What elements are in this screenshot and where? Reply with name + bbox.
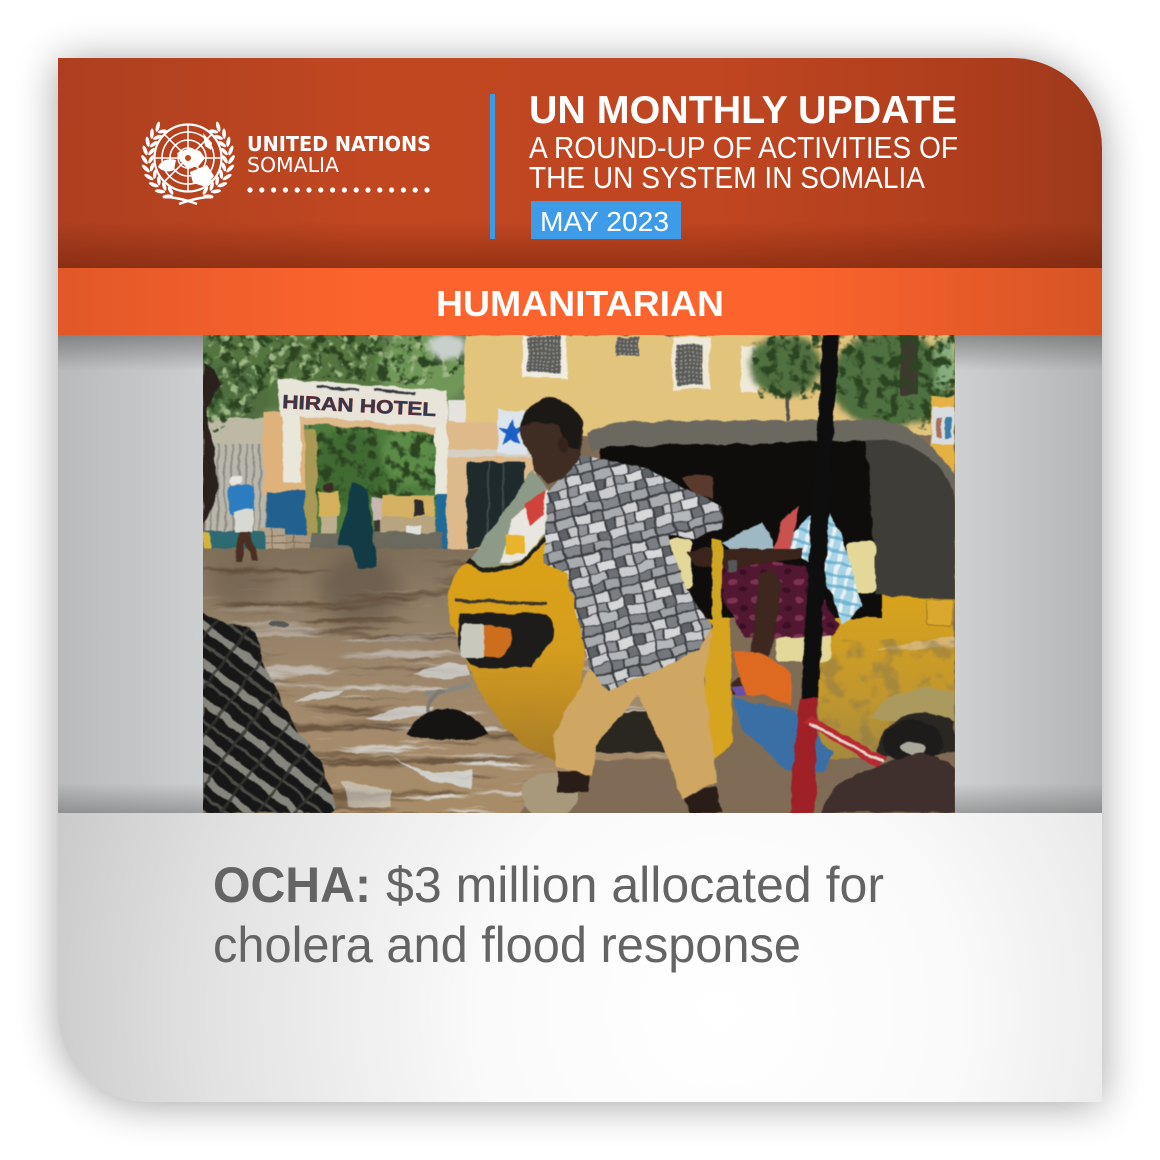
arch right pillar (432, 423, 450, 550)
orange section band (58, 268, 1102, 335)
passenger wrap (718, 562, 840, 638)
corrugated gate (205, 444, 267, 530)
lower caption background (58, 813, 1102, 1102)
man's lower legs (558, 772, 722, 813)
trees top left (203, 335, 466, 446)
barrels (204, 530, 266, 550)
foreground scarf (203, 612, 337, 813)
brick stack (258, 526, 312, 550)
passenger shirt (722, 505, 862, 625)
foreground face at left edge (203, 362, 220, 525)
mud splash (522, 773, 578, 817)
logo wordmark: SOMALIA (247, 153, 339, 177)
orange cargo (732, 650, 792, 708)
passenger arm and leg (688, 548, 802, 696)
shadow between legs (590, 712, 680, 752)
tree top right (748, 332, 955, 475)
man's trousers (553, 632, 717, 798)
title block: UN MONTHLY UPDATE (529, 89, 957, 132)
woman in dark hijab (337, 482, 377, 569)
right grey side panel (955, 335, 1102, 813)
rickshaw rear wheel (876, 714, 955, 764)
title block: A ROUND-UP OF ACTIVITIES OF (529, 130, 958, 165)
rickshaw roof (586, 420, 955, 490)
driver face in back (682, 474, 712, 500)
star sign (498, 410, 526, 454)
hiran hotel sign text: HIRAN HOTEL (282, 392, 437, 421)
black pole (801, 335, 839, 698)
rickshaw canvas rear (865, 430, 955, 600)
man's shirt (543, 455, 723, 692)
title block (529, 89, 958, 195)
front wheel (405, 685, 488, 740)
windshield (468, 470, 548, 570)
red and white bar (802, 716, 888, 768)
foreground hand (822, 752, 955, 813)
left grey side panel (58, 335, 204, 813)
rickshaw interior (600, 440, 882, 618)
caption headline: OCHA: (213, 857, 371, 913)
date badge (531, 201, 681, 239)
photo: flooded street with auto-rickshaw (190, 326, 955, 817)
title block: THE UN SYSTEM IN SOMALIA (529, 160, 925, 195)
caption headline: cholera and flood response (213, 917, 801, 973)
logo: United Nations emblem (140, 120, 236, 204)
arch left pillar (263, 412, 317, 535)
auto-rickshaw back body (818, 595, 955, 760)
header band (58, 58, 1102, 268)
yellow door post (705, 540, 732, 760)
red pole (790, 698, 817, 813)
blue sack (732, 697, 832, 772)
peach hotel wing (447, 422, 537, 550)
logo wordmark (247, 132, 431, 193)
headlight unit (455, 600, 553, 668)
low wall (310, 533, 442, 550)
caption headline (213, 857, 884, 973)
date badge: MAY 2023 (540, 206, 669, 237)
hiran hotel sign panel (278, 379, 466, 433)
muddy water under rickshaw (520, 752, 955, 813)
water (203, 549, 683, 813)
man in blue shirt (229, 475, 258, 562)
red bag (572, 612, 597, 648)
caption headline: $3 million allocated for (386, 857, 884, 913)
seats (668, 538, 875, 662)
blue divider bar (490, 94, 495, 239)
distant figures (319, 481, 423, 534)
water ripples (269, 621, 472, 808)
yellow building (465, 335, 955, 435)
man's head (519, 398, 582, 483)
trees through the arch (310, 425, 438, 537)
logo wordmark: UNITED NATIONS (247, 132, 431, 156)
rickshaw front body (448, 535, 585, 762)
section heading: HUMANITARIAN (436, 283, 724, 324)
